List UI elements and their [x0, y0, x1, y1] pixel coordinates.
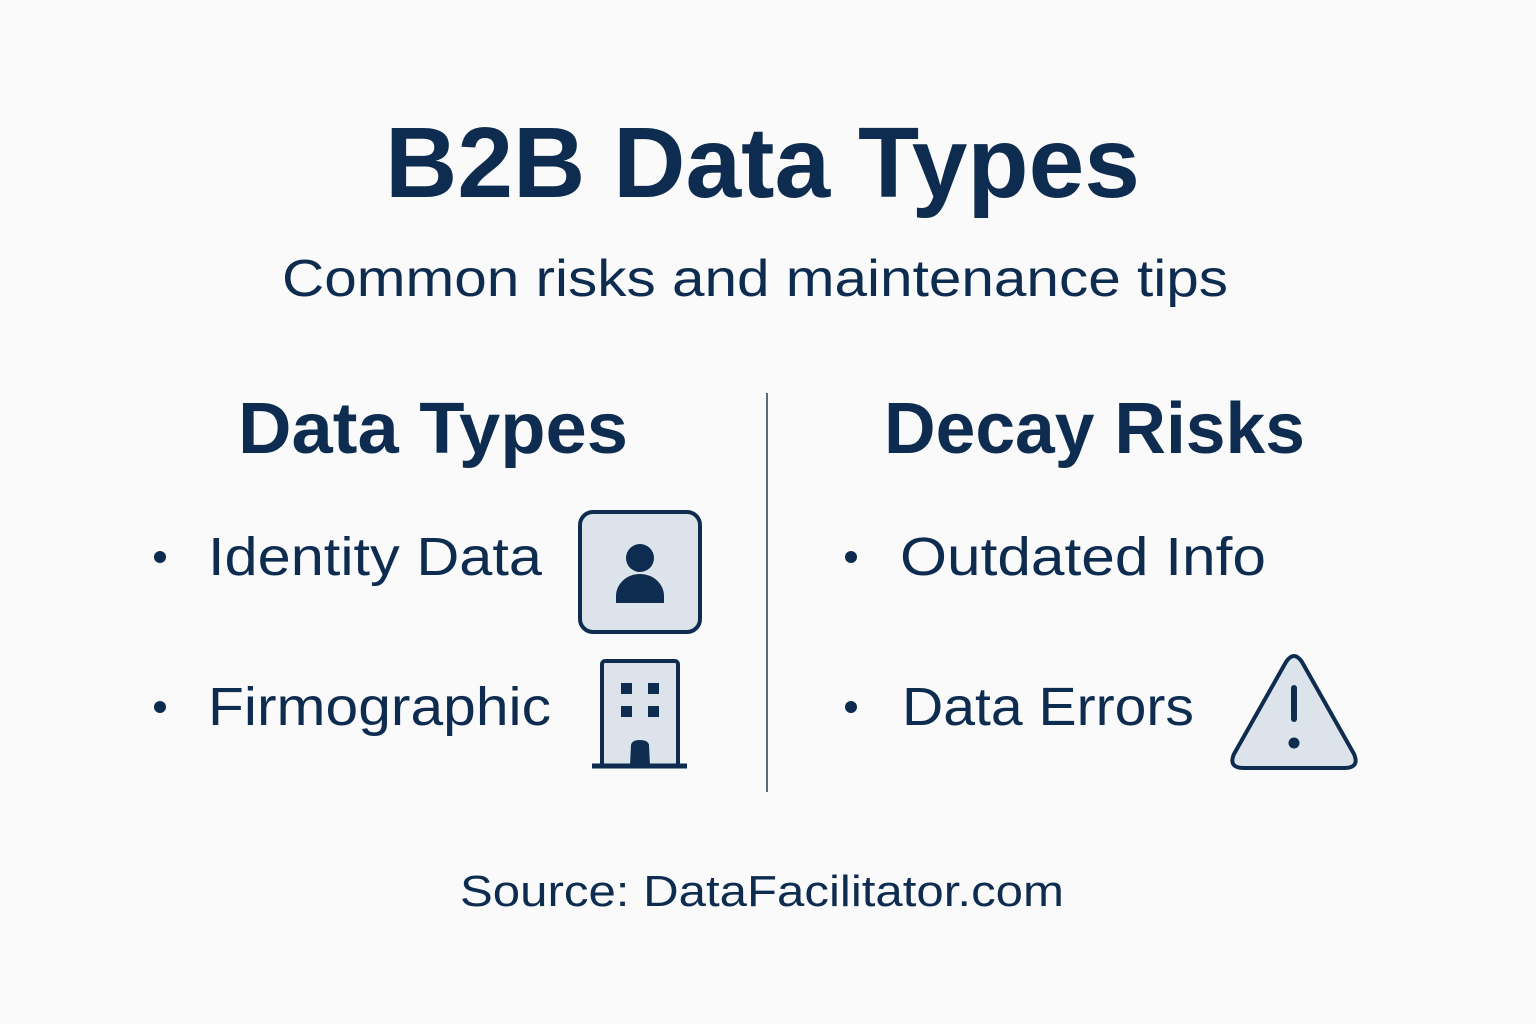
icon: warning triangle	[1232, 656, 1356, 768]
source: Source: DataFacilitator.com	[460, 867, 1064, 916]
item: firmographic: Firmographic	[208, 677, 551, 737]
item: data errors: Data Errors	[902, 677, 1194, 737]
icon: building	[592, 661, 687, 766]
icon: identity card	[580, 512, 700, 632]
panel: data types	[154, 389, 700, 766]
panel: decay risks	[845, 389, 1356, 768]
item: outdated info: Outdated Info	[900, 527, 1266, 587]
divider	[766, 393, 768, 792]
heading: decay risks: Decay Risks	[884, 389, 1305, 469]
title: B2B Data Types	[385, 107, 1140, 219]
item: identity data: Identity Data	[208, 527, 543, 587]
subtitle: Common risks and maintenance tips	[282, 250, 1228, 308]
heading: data types: Data Types	[238, 389, 628, 469]
